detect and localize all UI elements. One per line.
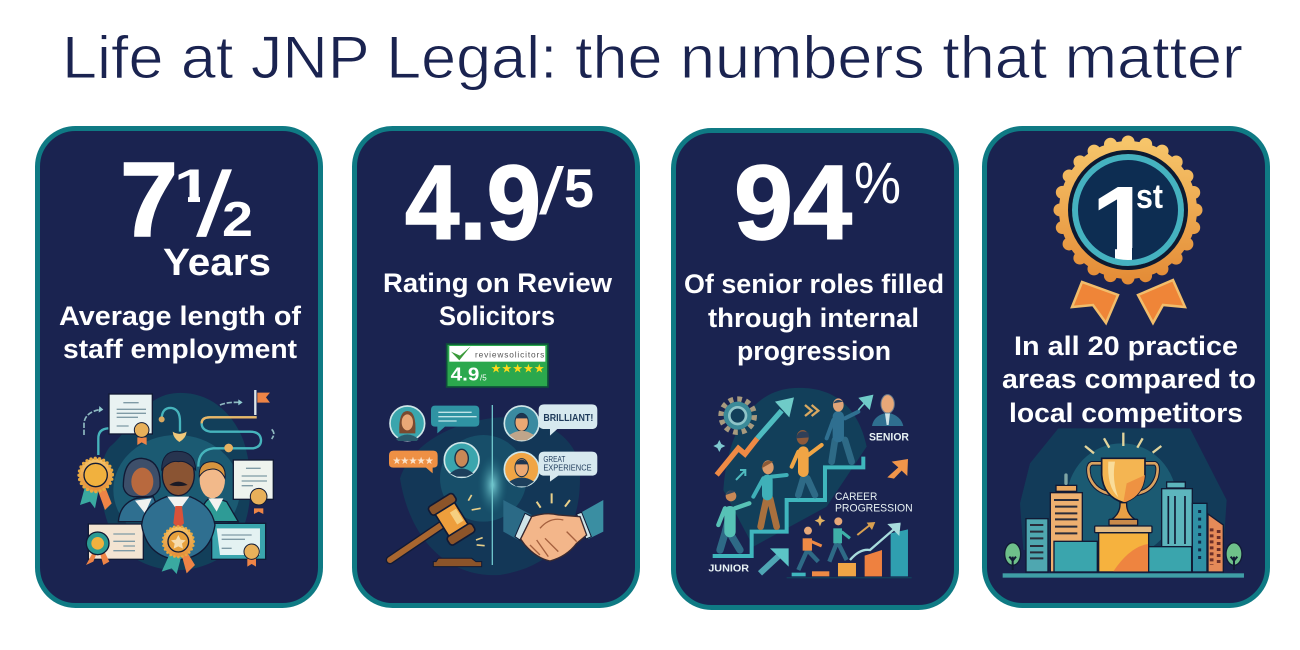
- handshake: [503, 493, 603, 561]
- description: [383, 268, 613, 331]
- description: areas compared to: [1002, 364, 1256, 394]
- illustration: trophy and city: [1003, 428, 1244, 578]
- badge: reviewsolicitors: 4.9: [451, 364, 479, 385]
- title: Life at JNP Legal: the numbers that matter: [62, 24, 1243, 91]
- badge: reviewsolicitors: /5: [480, 374, 487, 383]
- description: [1002, 331, 1256, 428]
- labels: SENIOR: [869, 431, 909, 443]
- rosettes: [79, 423, 267, 574]
- description: staff employment: [63, 334, 297, 364]
- description: through internal: [708, 303, 919, 333]
- description: Rating on Review: [383, 268, 613, 298]
- description: progression: [737, 336, 891, 366]
- stat: 4.9 out of 5: /: [539, 154, 565, 228]
- icon: first place medal: 1: [1091, 165, 1153, 283]
- gavel: [390, 492, 485, 567]
- trophy: [1088, 458, 1158, 525]
- illustration: reviews, gavel and handshake: GREAT: [543, 454, 566, 464]
- stat: 7 1/2 years: [120, 141, 271, 284]
- small climbers and bar chart: [787, 517, 912, 578]
- illustration: career progression stairs: CAREER: [835, 491, 877, 503]
- card background: [674, 130, 956, 608]
- stat: 4.9 out of 5: 5: [564, 157, 594, 219]
- stat: 7 1/2 years: Years: [163, 242, 271, 284]
- stat: 94%: %: [854, 151, 901, 216]
- stat: 4.9 out of 5: 4.9: [405, 144, 541, 262]
- buildings: [1026, 482, 1223, 572]
- stairs: [713, 457, 863, 556]
- card background: [354, 128, 638, 606]
- description: [59, 301, 302, 364]
- stat: 94%: 94: [734, 144, 852, 262]
- description: Of senior roles filled: [684, 269, 944, 299]
- icon: first place medal: [1059, 141, 1197, 323]
- badge: reviewsolicitors: reviewsolicitors: [475, 350, 544, 360]
- podium: [1095, 526, 1152, 572]
- senior icon: [872, 395, 903, 426]
- rays: [1085, 433, 1161, 453]
- illustration: reviews, gavel and handshake: [389, 404, 603, 575]
- stat: 7 1/2 years: /: [196, 154, 233, 256]
- illustration: staff with awards: [79, 390, 274, 574]
- gear: [721, 399, 754, 432]
- people: [118, 497, 163, 522]
- panel: staff employment: [38, 128, 320, 606]
- certificates: [88, 394, 273, 559]
- description: [684, 269, 944, 366]
- trees: [1005, 543, 1242, 570]
- growth arrow: [717, 438, 757, 475]
- description: local competitors: [1009, 398, 1243, 428]
- stat: 7 1/2 years: 7: [120, 141, 178, 259]
- card background: [984, 128, 1268, 606]
- stat: 7 1/2 years: 1: [174, 159, 211, 212]
- small arrows and sparkle: [760, 552, 783, 573]
- speech bubbles: [431, 406, 479, 433]
- icon: first place medal: st: [1136, 178, 1163, 216]
- description: In all 20 practice: [1014, 331, 1238, 361]
- stat: 7 1/2 years: 2: [222, 193, 253, 247]
- card background: [38, 128, 320, 606]
- badge: reviewsolicitors: ★★★★★: [491, 362, 545, 376]
- illustration: career progression stairs: [708, 388, 913, 578]
- illustration: career progression stairs: PROGRESSION: [835, 502, 913, 514]
- panel: practice areas: [984, 128, 1268, 606]
- badge: reviewsolicitors: [447, 344, 548, 387]
- illustration: reviews, gavel and handshake: ★★★★★: [392, 456, 434, 467]
- climbing people: [718, 412, 858, 550]
- description: Average length of: [59, 301, 302, 331]
- panel: internal progression: [674, 130, 956, 608]
- illustration: reviews, gavel and handshake: EXPERIENCE: [543, 462, 592, 472]
- panel: review rating: [354, 128, 638, 606]
- orange arrow: [887, 459, 908, 479]
- review avatars: [390, 406, 539, 487]
- illustration: career progression stairs: JUNIOR: [708, 564, 750, 575]
- paths and flag: [98, 408, 261, 467]
- ground: [1003, 573, 1244, 578]
- description: Solicitors: [439, 301, 555, 331]
- illustration: reviews, gavel and handshake: BRILLIANT!: [543, 413, 593, 424]
